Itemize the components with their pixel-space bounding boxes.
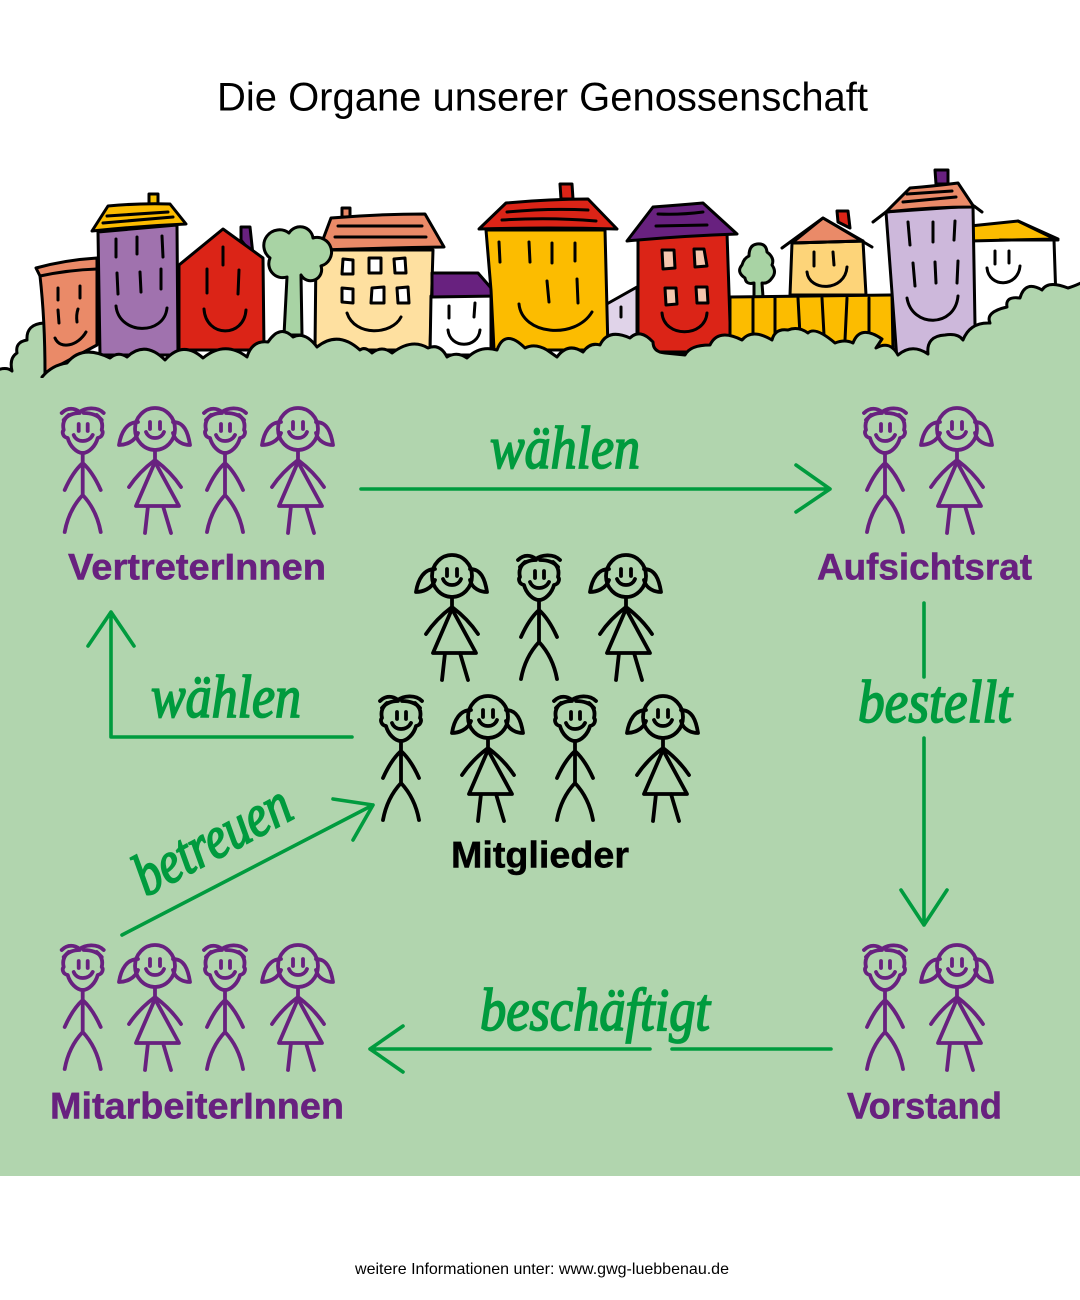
tall lilac house xyxy=(873,170,982,360)
figures: VertreterInnen xyxy=(62,408,333,533)
label: Vorstand: Vorstand xyxy=(847,1086,1002,1126)
label: VertreterInnen: VertreterInnen xyxy=(68,546,326,588)
handwriting: wählen top: wählen xyxy=(490,415,640,481)
tree xyxy=(264,227,332,335)
handwriting: betreuen: betreuen xyxy=(121,770,302,908)
arrow: Aufsichtsrat to Vorstand xyxy=(901,603,947,925)
bush behind left house xyxy=(0,323,50,385)
arrow: Mitglieder to VertreterInnen xyxy=(88,612,352,737)
group: Vorstand xyxy=(847,945,1002,1126)
cream house xyxy=(315,208,444,350)
handwriting: beschäftigt: beschäftigt xyxy=(480,977,711,1043)
figures: Vorstand xyxy=(864,945,992,1070)
group: Mitglieder xyxy=(380,555,698,876)
figures: MitarbeiterInnen xyxy=(62,945,333,1070)
houses and town skyline xyxy=(0,170,1080,420)
green ground xyxy=(0,378,1080,1176)
group: MitarbeiterInnen xyxy=(50,945,344,1126)
figures: Aufsichtsrat xyxy=(864,408,992,533)
arrow: Vorstand to MitarbeiterInnen xyxy=(370,1026,831,1072)
purple house xyxy=(92,194,186,355)
white house with purple roof xyxy=(430,273,498,355)
red gabled house xyxy=(179,227,264,350)
label: Mitglieder: Mitglieder xyxy=(451,834,629,876)
lilac shed xyxy=(605,287,637,345)
handwriting: wählen left: wählen xyxy=(151,664,301,730)
handwriting: bestellt: bestellt xyxy=(858,669,1013,735)
label: Aufsichtsrat: Aufsichtsrat xyxy=(817,546,1032,588)
white house with yellow roof xyxy=(970,221,1058,330)
red house with purple roof xyxy=(627,203,737,352)
small tree xyxy=(740,244,774,297)
group: Aufsichtsrat xyxy=(817,408,1032,588)
front bushes xyxy=(42,281,1080,420)
group: VertreterInnen xyxy=(62,408,333,588)
footer text: weitere Informationen unter: www.gwg-luebbenau.de xyxy=(354,1261,729,1278)
title: Die Organe unserer Genossenschaft xyxy=(217,76,868,120)
label: MitarbeiterInnen: MitarbeiterInnen xyxy=(50,1086,344,1126)
arrow: VertreterInnen to Aufsichtsrat xyxy=(361,465,830,512)
yellow house xyxy=(479,184,617,350)
figures: Mitglieder xyxy=(380,555,698,821)
small yellow house xyxy=(782,211,872,295)
salmon house xyxy=(36,258,97,373)
arrow: MitarbeiterInnen to Mitglieder xyxy=(122,799,373,935)
yellow fence xyxy=(730,295,893,350)
